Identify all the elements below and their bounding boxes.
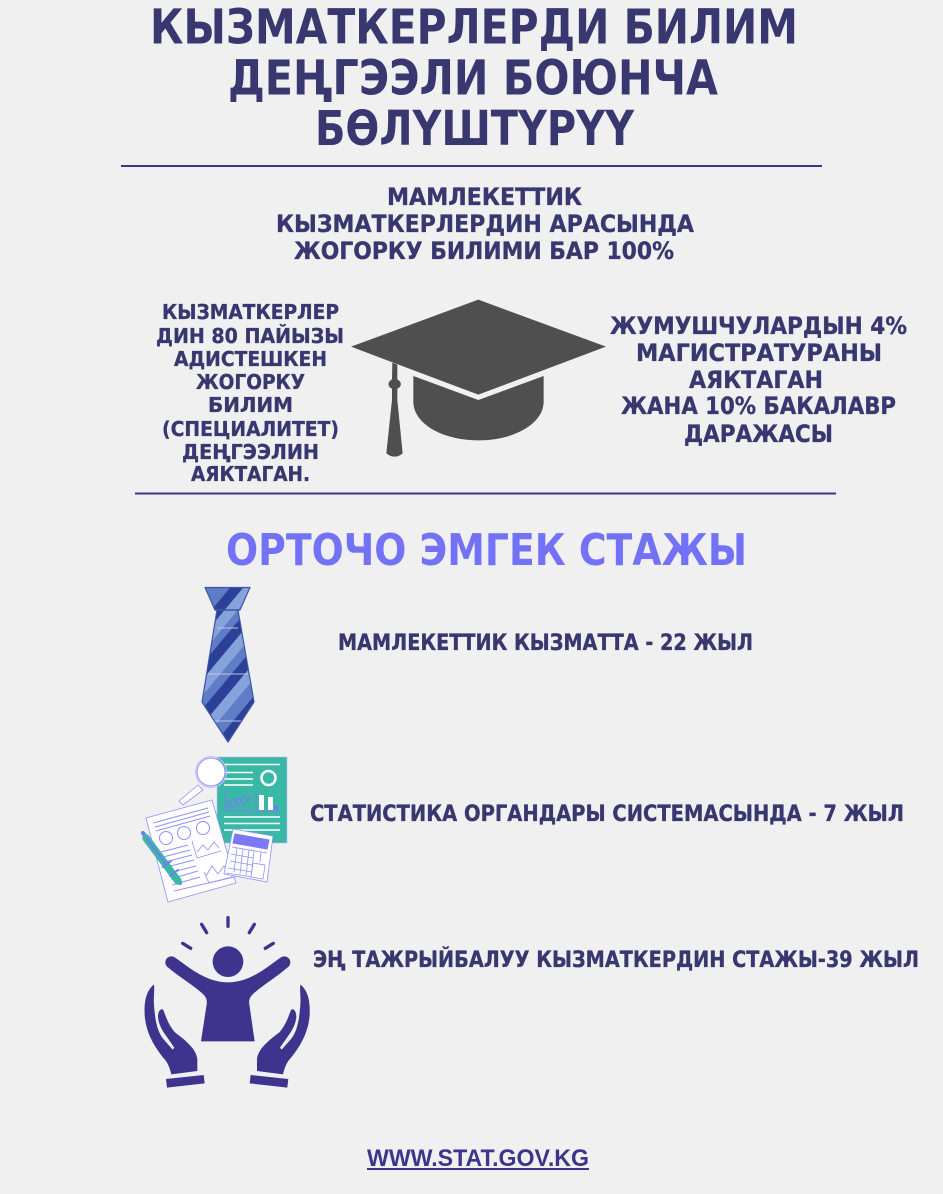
row text: years in civil service: МАМЛЕКЕТТИК КЫЗМАТТА - 22 ЖЫЛ: [338, 631, 753, 656]
text block: specialist level 80%: ДЕҢГЭЭЛИН: [182, 440, 319, 464]
text block: specialist level 80%: КЫЗМАТКЕРЛЕР: [162, 300, 339, 324]
text block: specialist level 80%: АЯКТАГАН.: [191, 462, 310, 486]
footer link text: WWW.STAT.GOV.KG: [367, 1145, 589, 1172]
text block: specialist level 80%: ЖОГОРКУ: [196, 370, 305, 394]
title: [150, 0, 798, 157]
title: БӨЛҮШТҮРҮҮ: [315, 101, 635, 157]
subtitle: higher education 100%: КЫЗМАТКЕРЛЕРДИН АРАСЫНДА: [276, 210, 694, 238]
calculator: [224, 829, 273, 882]
subtitle: higher education 100%: [276, 183, 694, 265]
title: КЫЗМАТКЕРЛЕРДИ БИЛИМ: [150, 0, 798, 56]
right hand: [250, 984, 310, 1088]
white statistics page: [146, 800, 236, 902]
text block: specialist level 80%: ДИН 80 ПАЙЫЗЫ: [156, 323, 344, 348]
left hand: [145, 984, 205, 1088]
subtitle: higher education 100%: МАМЛЕКЕТТИК: [387, 183, 582, 211]
title: ДЕҢГЭЭЛИ БОЮНЧА: [228, 50, 718, 106]
person: [165, 946, 290, 1041]
text block: master's and bachelor's degrees: [610, 312, 907, 448]
text block: specialist level 80%: [156, 300, 344, 486]
text block: master's and bachelor's degrees: ДАРАЖАСЫ: [684, 420, 833, 448]
text block: master's and bachelor's degrees: ЖАНА 10% БАКАЛАВР: [621, 392, 896, 420]
icon: person held by hands: [145, 918, 310, 1088]
radiating lines: [183, 918, 273, 948]
text block: specialist level 80%: АДИСТЕШКЕН: [174, 347, 327, 371]
text block: master's and bachelor's degrees: ЖУМУШЧУЛАРДЫН 4%: [610, 312, 907, 340]
text block: master's and bachelor's degrees: МАГИСТРАТУРАНЫ: [636, 339, 882, 367]
icon: statistical documents: [143, 756, 287, 902]
icon: necktie: [201, 586, 255, 743]
subtitle: higher education 100%: ЖОГОРКУ БИЛИМИ БАР 100%: [294, 237, 674, 265]
text block: specialist level 80%: БИЛИМ: [208, 393, 293, 417]
text block: master's and bachelor's degrees: АЯКТАГАН: [689, 366, 823, 394]
text block: specialist level 80%: (СПЕЦИАЛИТЕТ): [162, 417, 339, 441]
pen: [143, 833, 180, 883]
icon: graduation cap: [351, 300, 606, 457]
teal report sheet: [217, 757, 287, 843]
heading: average work experience: ОРТОЧО ЭМГЕК СТАЖЫ: [226, 525, 747, 576]
magnifying glass: [179, 756, 226, 805]
